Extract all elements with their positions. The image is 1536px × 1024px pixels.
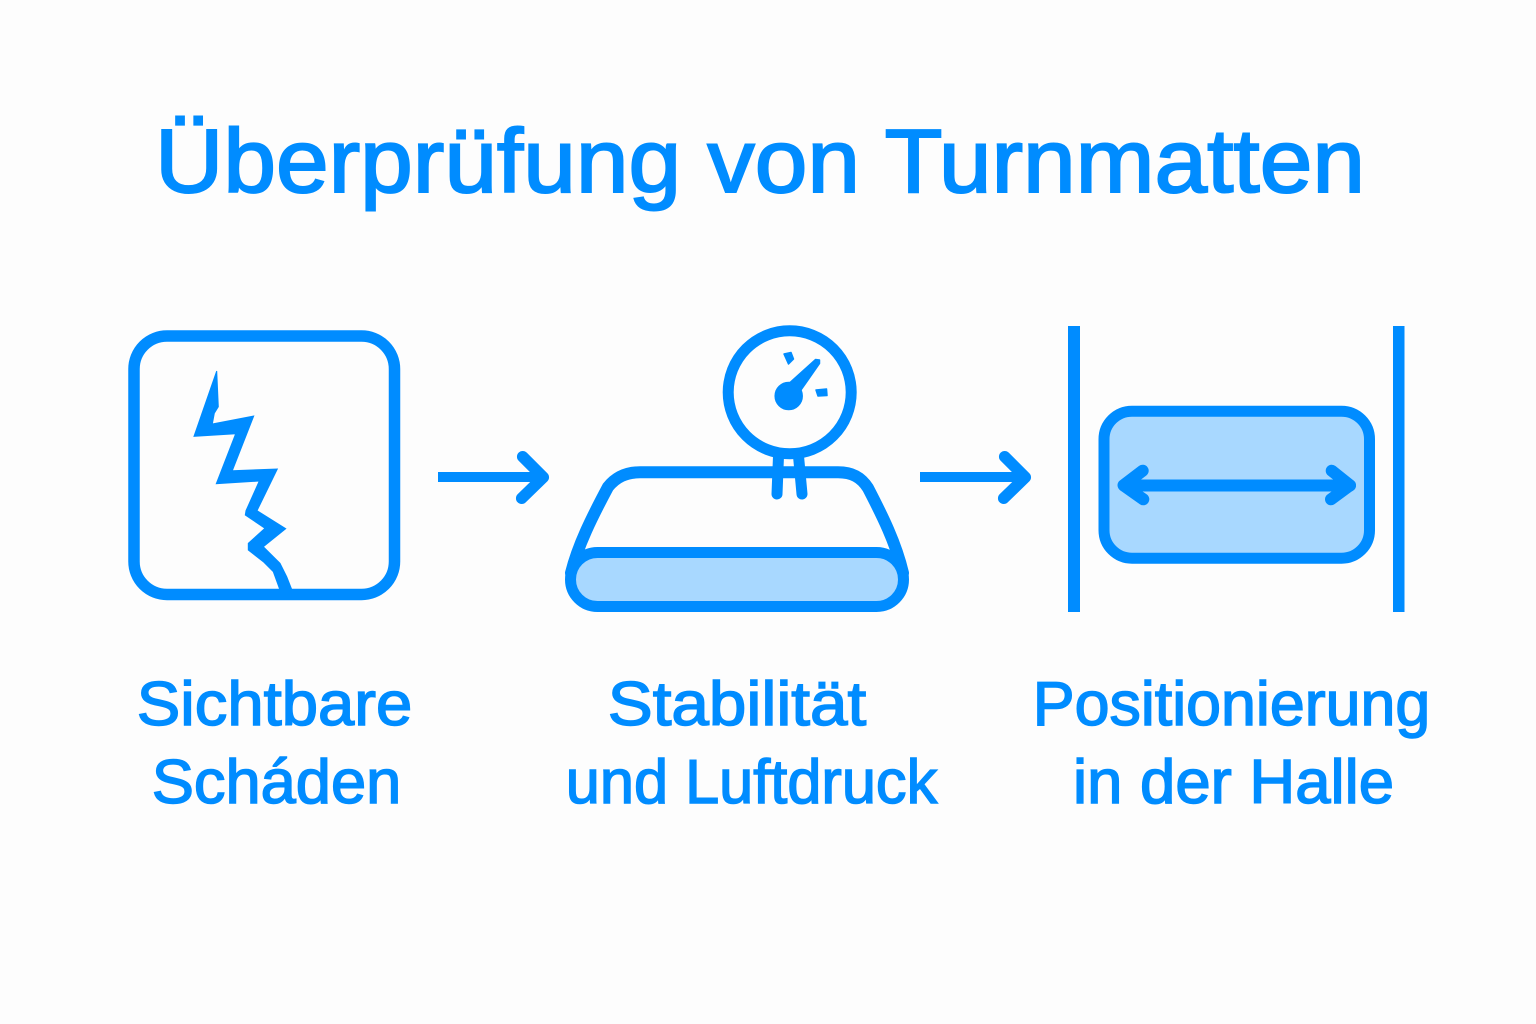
title: Überprüfung von Turnmatten: [155, 112, 1365, 212]
double arrow: [1124, 471, 1350, 499]
label: positioning in the hall: [1033, 670, 1430, 817]
label: positioning in the hall: in der Halle: [1073, 748, 1394, 817]
label: visible damage: [137, 670, 412, 817]
arrow: step one to step two: [438, 457, 543, 498]
label: visible damage: Sichtbare: [137, 670, 412, 739]
gauge needle: [775, 360, 820, 410]
icon: air mat with pressure gauge: [570, 331, 904, 606]
gauge stem: [777, 456, 802, 494]
right wall: [1393, 326, 1404, 612]
label: stability and air pressure: und Luftdruck: [566, 748, 938, 817]
mat roll base: [570, 552, 904, 606]
mat body: [571, 472, 903, 573]
label: stability and air pressure: Stabilität: [608, 670, 866, 739]
mat outline: [134, 336, 394, 594]
crack: [194, 371, 293, 592]
icon: damaged mat with crack: [134, 336, 394, 594]
label: stability and air pressure: [566, 670, 938, 817]
label: visible damage: Scháden: [152, 748, 401, 817]
positioned mat: [1104, 411, 1370, 558]
label: positioning in the hall: Positionierung: [1033, 670, 1430, 739]
gauge dial: [728, 331, 851, 454]
left wall: [1068, 326, 1080, 612]
icon: mat positioned between hall walls: [1068, 326, 1404, 612]
arrow: step two to step three: [920, 457, 1025, 498]
gauge tick marks: [784, 352, 827, 396]
